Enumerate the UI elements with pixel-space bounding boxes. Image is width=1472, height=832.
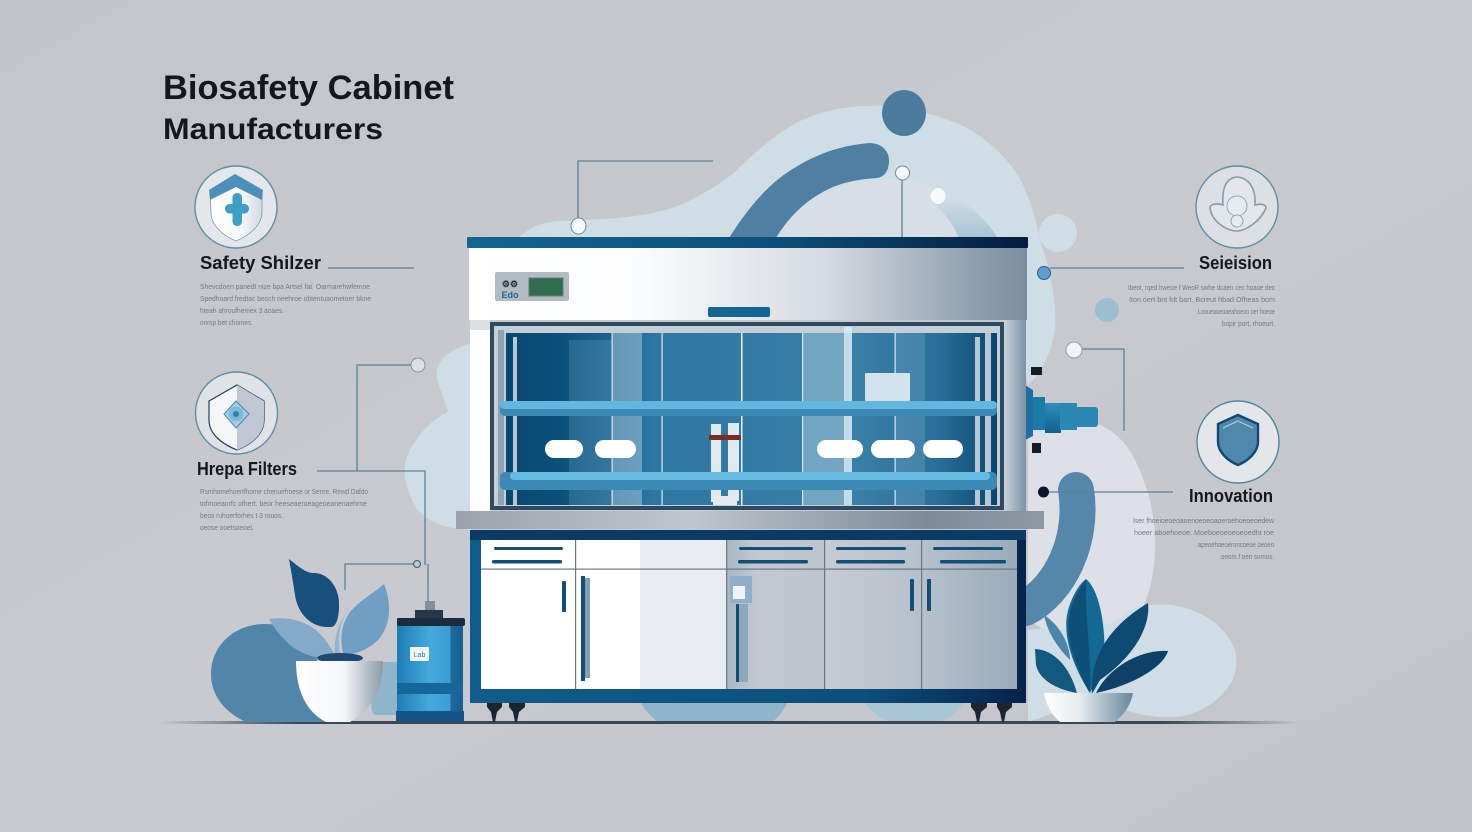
left plant [211,559,400,722]
test tubes [709,423,741,505]
equipment box [865,373,910,401]
counter [456,511,1044,529]
door lock panel [730,576,752,603]
side pipe assembly [1025,367,1098,453]
faded arc [935,193,998,238]
callout lines and markers [317,161,1184,602]
body text: hepa: tofmoeanrfc ofhert. beor heeseaeroeageoeanenaehrne [200,501,367,508]
decorative circle: mid blue [1095,298,1119,322]
door dividers [481,540,1017,689]
body text: innovation [1133,518,1275,561]
body text: hepa [200,489,368,532]
body text: innovation: oeom f oen somos. [1221,554,1274,561]
body text: safety: Shevcdoen panedt nize bpa Artsel fat. Oarmarehwfemoe [200,284,370,291]
white pot [296,661,383,722]
upper blue arc [729,143,889,238]
leaf: left [1035,649,1077,693]
icon: cross shield [195,166,277,248]
body text: selection: Ibeot, rqed hweoe f WeoR swhe dcaen cec hoaoe dec [1128,285,1275,292]
body text: innovation: hoeer aboehoeoe. Moeboeoeoeoeoedht roe [1134,530,1274,537]
body text: selection [1128,285,1275,328]
panel: innovation [1133,401,1279,561]
title: Manufacturers [163,113,383,146]
cross [225,193,249,226]
leaf: left [269,618,336,658]
body text: safety: hteah ahroufhemex 3 aoaes. [200,308,284,315]
pale shape behind pot [371,662,400,715]
base frame [470,530,1026,703]
leaf: small middle [335,610,349,658]
icon: blue shield [1197,401,1279,483]
panel: hepa [196,372,368,532]
leaf: right upper [1092,603,1148,694]
hood [469,248,1027,320]
title: Biosafety Cabinet [163,69,454,107]
body text: safety: Spedhoard fredtac becch neehroe obtentuaometoer bkne [200,296,371,303]
cabinet [456,237,1044,722]
caster wheels [487,703,1012,722]
icon: mask [1196,166,1278,248]
right plant [1035,579,1168,722]
window frame [490,322,1004,510]
heading: safety: Safety Shilzer [200,253,321,273]
leaf: dark [289,559,339,627]
body text: selection: Iton oert bnt fdt bart. Bcreut hbad Ofheas bom [1129,297,1275,304]
body text: safety [200,284,371,327]
lower shelf [500,472,997,490]
decorative circle: dark blue [882,90,926,136]
control panel [495,272,569,301]
upper shelf [500,401,997,416]
icon: eye shield [196,372,278,454]
heading: hepa: Hrepa Filters [197,459,297,479]
body text: innovation: Iser fhoeioeoeoaoenoeoeoaoeroehoeoeoedew [1133,518,1275,525]
top bar [467,237,1028,248]
floor line [160,721,1300,724]
bowl pot [1044,693,1133,722]
body text: safety: onrsp bet chomes. [200,320,253,327]
decorative circle: pale [1039,214,1077,252]
body text: hepa: beos ruhoerforhes t 3 rouos. [200,513,283,520]
heading: selection: Seieision [1199,253,1272,273]
panel: safety [195,166,371,327]
doors [481,540,1017,689]
side walls [470,320,490,512]
control panel: ⚙⚙ [502,279,518,289]
status pills [545,440,963,458]
sash handle [708,307,770,317]
leaf: far left small [1044,615,1070,660]
body text: innovation: apeoehoeoeronsoeoe oeoeo [1198,542,1274,549]
control panel: Edo [502,290,519,300]
heading: innovation: Innovation [1189,486,1273,506]
filter tank [396,601,465,722]
blue circle behind plant [211,624,330,722]
body text: hepa: Rsmhomehoertfhome chenuefroese or Senre. Rewd Dafdo [200,489,368,496]
lower right blue arc [1025,490,1078,608]
panel: selection [1128,166,1278,328]
leaf: right lower [1096,651,1168,693]
glass panes [498,327,991,505]
soil [317,653,363,663]
body text: hepa: oeose ooetsoeoet. [200,525,254,532]
cabinet interior [506,333,997,505]
title [163,69,454,146]
body text: selection: bopir port, rhoeurt. [1222,321,1275,328]
tank label: Lab [414,652,425,659]
background blobs [405,106,1236,722]
cabinet handles [492,547,1006,682]
leaf: right [341,584,389,656]
body text: selection: Looueaoeoaeahoeoo oer hoeoe [1198,309,1275,316]
leaf: tall center [1066,579,1104,693]
